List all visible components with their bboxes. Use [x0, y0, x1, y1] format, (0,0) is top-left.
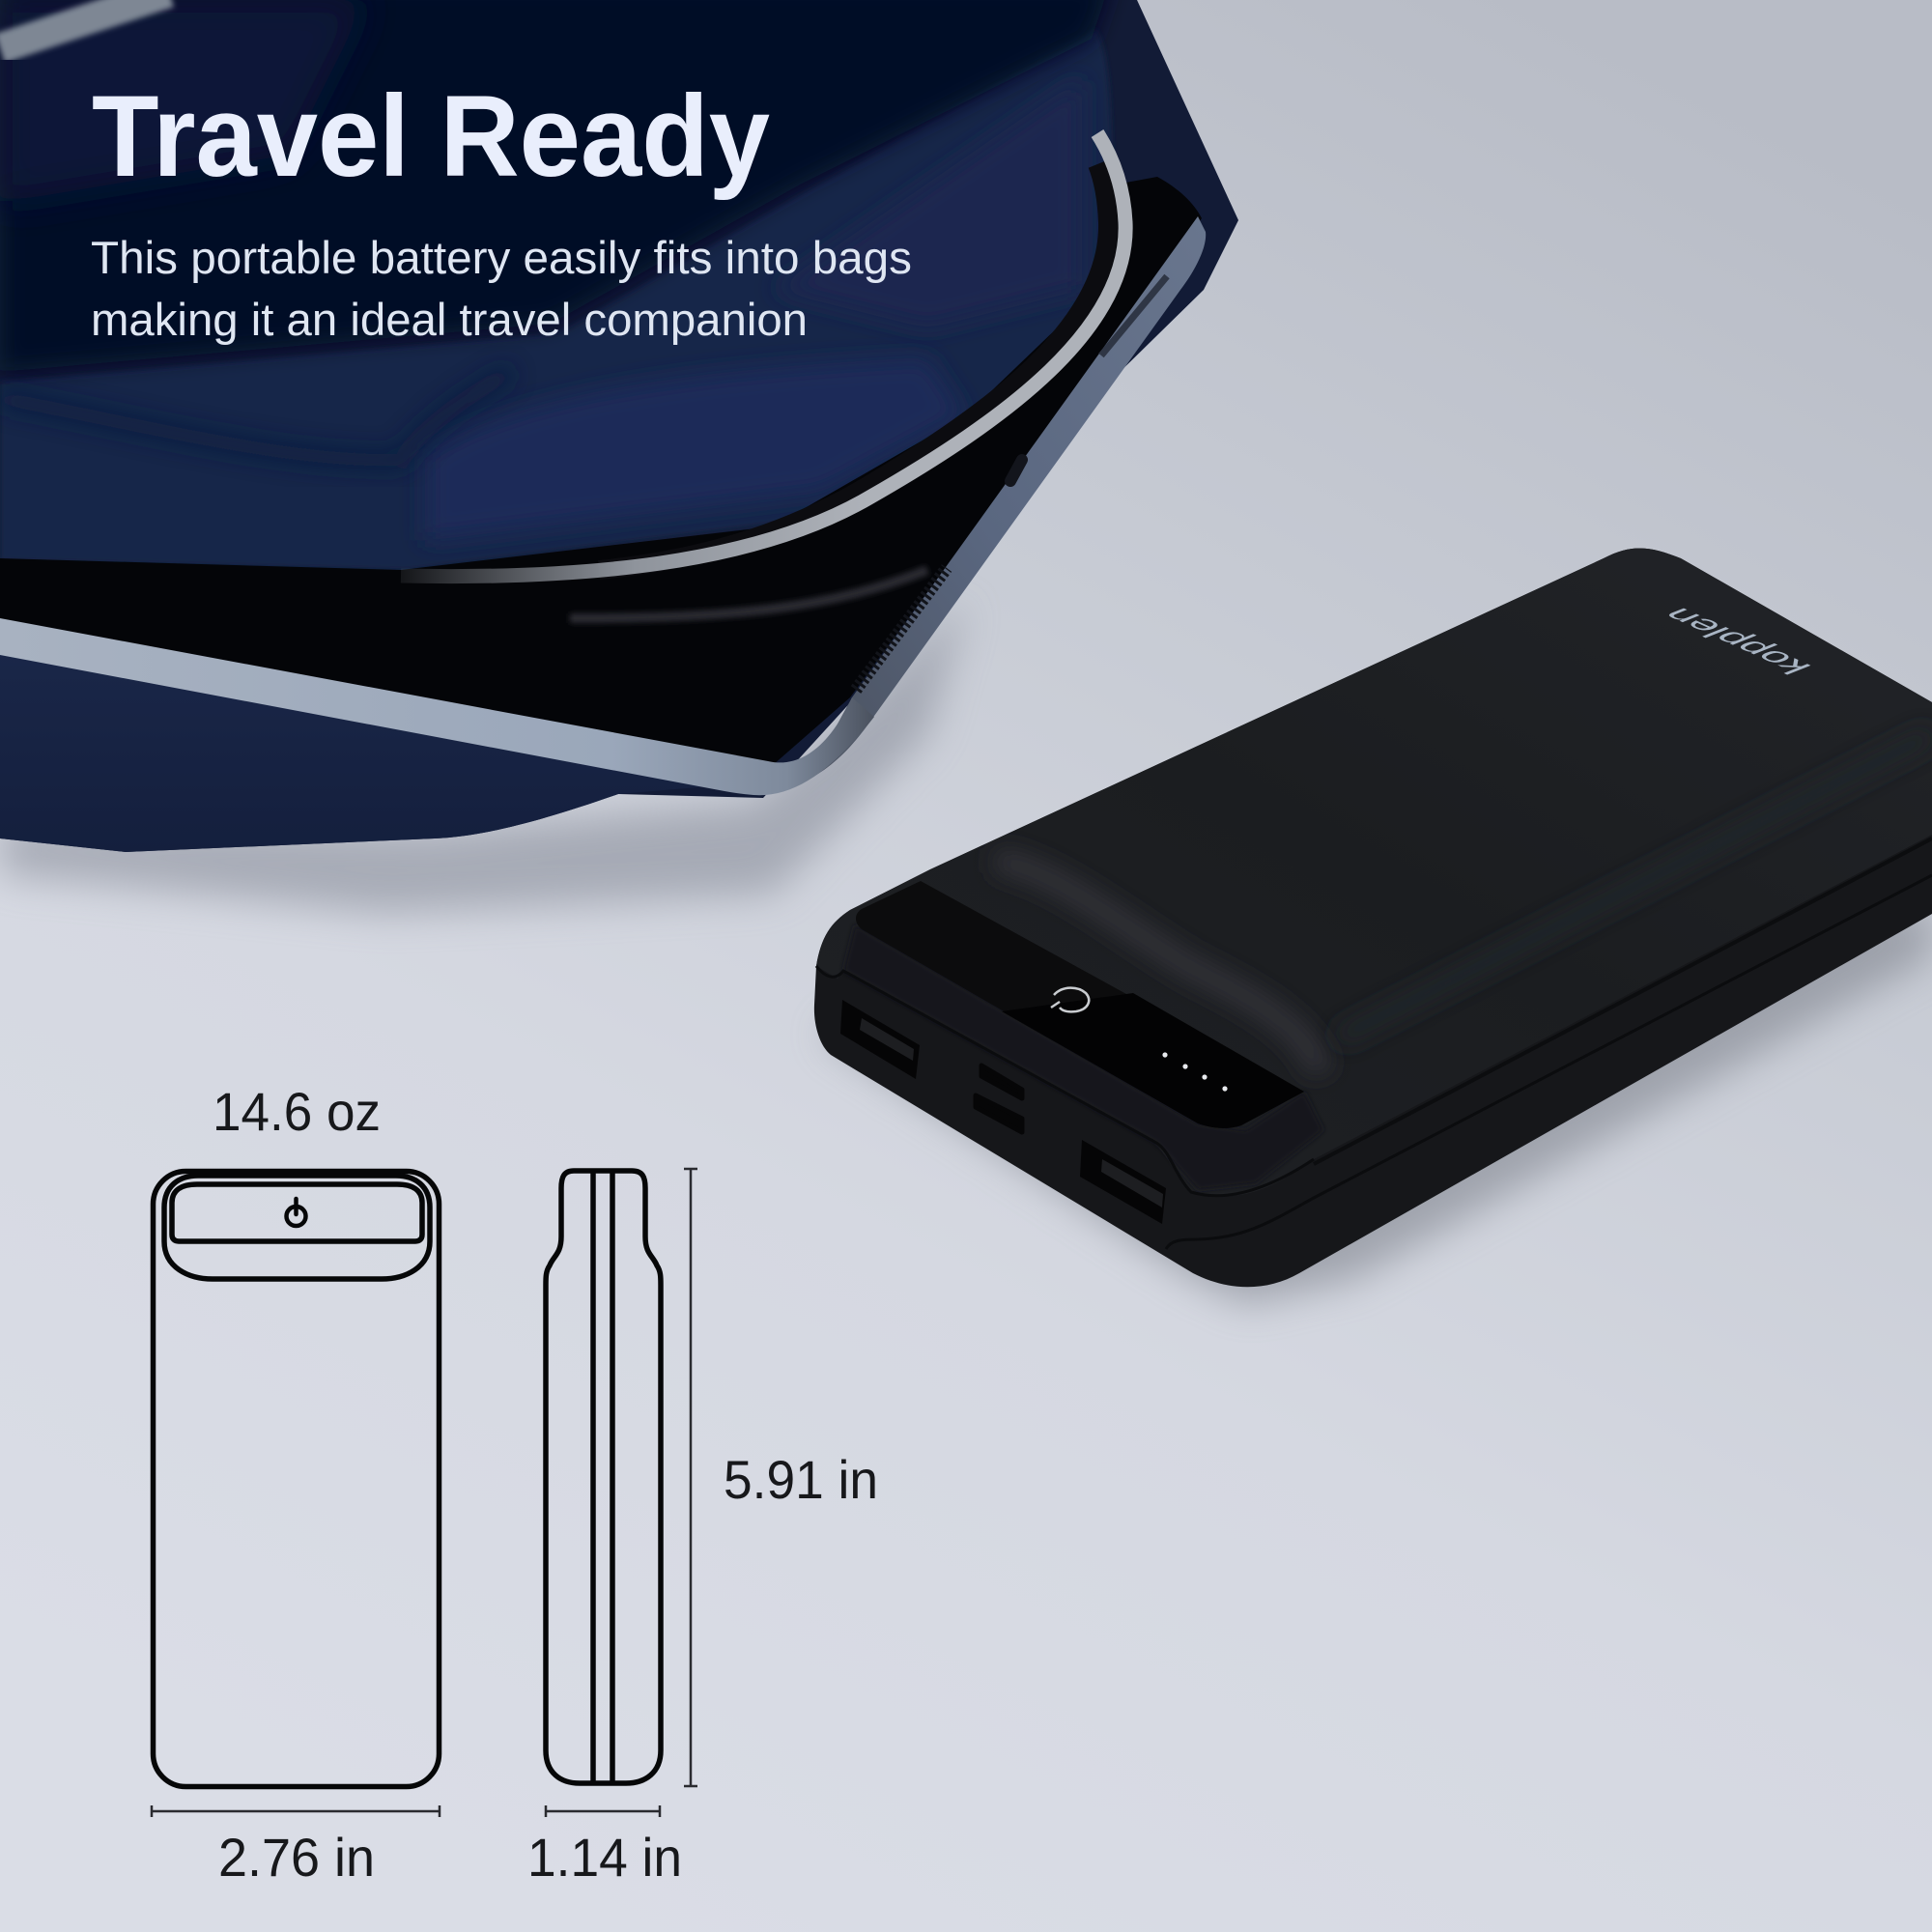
display panel	[856, 881, 1304, 1128]
display panel dark reflection	[1002, 993, 1304, 1128]
zipper teeth	[401, 133, 1125, 577]
side center seam lines	[593, 1171, 612, 1785]
interior lighter top-left	[0, 0, 367, 203]
table shadow under the bag	[0, 599, 966, 913]
depth dimension line	[546, 1805, 660, 1817]
front cap outline	[164, 1176, 430, 1279]
fabric crease shadow	[0, 372, 512, 460]
power symbol	[286, 1199, 305, 1226]
photo: bag with tablet	[0, 0, 1238, 913]
top-left zipper	[0, 0, 169, 48]
power button icon	[1051, 988, 1089, 1011]
USB-C port top	[981, 1065, 1022, 1098]
zipper tape	[599, 164, 1108, 570]
title: Travel Ready	[92, 71, 770, 201]
side body outline	[546, 1171, 661, 1783]
cap front roll shading	[843, 924, 1323, 1190]
tablet side speaker grille	[1101, 276, 1167, 355]
tablet bottom silver edge	[0, 618, 874, 795]
tablet side button	[1010, 460, 1022, 481]
width label: 2.76 in	[218, 1827, 375, 1888]
tablet right silver edge	[807, 216, 1206, 781]
USB port left	[840, 1000, 920, 1079]
bag dark interior	[0, 0, 1111, 372]
highlights clipped to the body	[994, 848, 1332, 1074]
tablet screen	[0, 177, 1202, 765]
lower seam line	[1166, 875, 1932, 1249]
subtitle: making it an ideal travel companion	[91, 294, 808, 345]
depth label: 1.14 in	[527, 1827, 682, 1888]
tablet speaker grille	[856, 568, 947, 690]
photo: power bank	[814, 548, 1932, 1304]
fabric highlight	[425, 357, 966, 541]
icon: power bank side outline	[546, 1171, 661, 1785]
navy bag body	[0, 0, 1238, 852]
power bank shadow	[821, 908, 1932, 1304]
upper fabric fold	[0, 29, 1113, 570]
top face side highlight	[1338, 734, 1932, 1038]
height dimension line	[684, 1169, 697, 1786]
USB-C port bottom	[976, 1095, 1022, 1132]
battery LED dots	[1162, 1052, 1228, 1092]
subtitle: This portable battery easily fits into bags	[91, 232, 912, 283]
USB port right	[1080, 1140, 1166, 1224]
weight label: 14.6 oz	[213, 1081, 381, 1142]
zipper reflection in screen	[570, 570, 927, 618]
width dimension line	[152, 1805, 440, 1817]
power bank body	[814, 548, 1932, 1287]
front body outline	[153, 1171, 439, 1787]
cap ridge highlight	[995, 860, 1321, 1072]
lower bag fabric	[0, 638, 753, 852]
seam line on front	[816, 966, 1314, 1196]
height label: 5.91 in	[724, 1449, 878, 1510]
power bank top face	[816, 548, 1932, 1196]
fabric upper highlight	[773, 77, 1082, 328]
icon: power bank front outline	[153, 1171, 439, 1787]
brand logo: kopplen	[1652, 605, 1820, 678]
subtitle	[91, 232, 912, 345]
side shell shadow line	[1314, 838, 1932, 1164]
front display outline	[172, 1184, 422, 1241]
